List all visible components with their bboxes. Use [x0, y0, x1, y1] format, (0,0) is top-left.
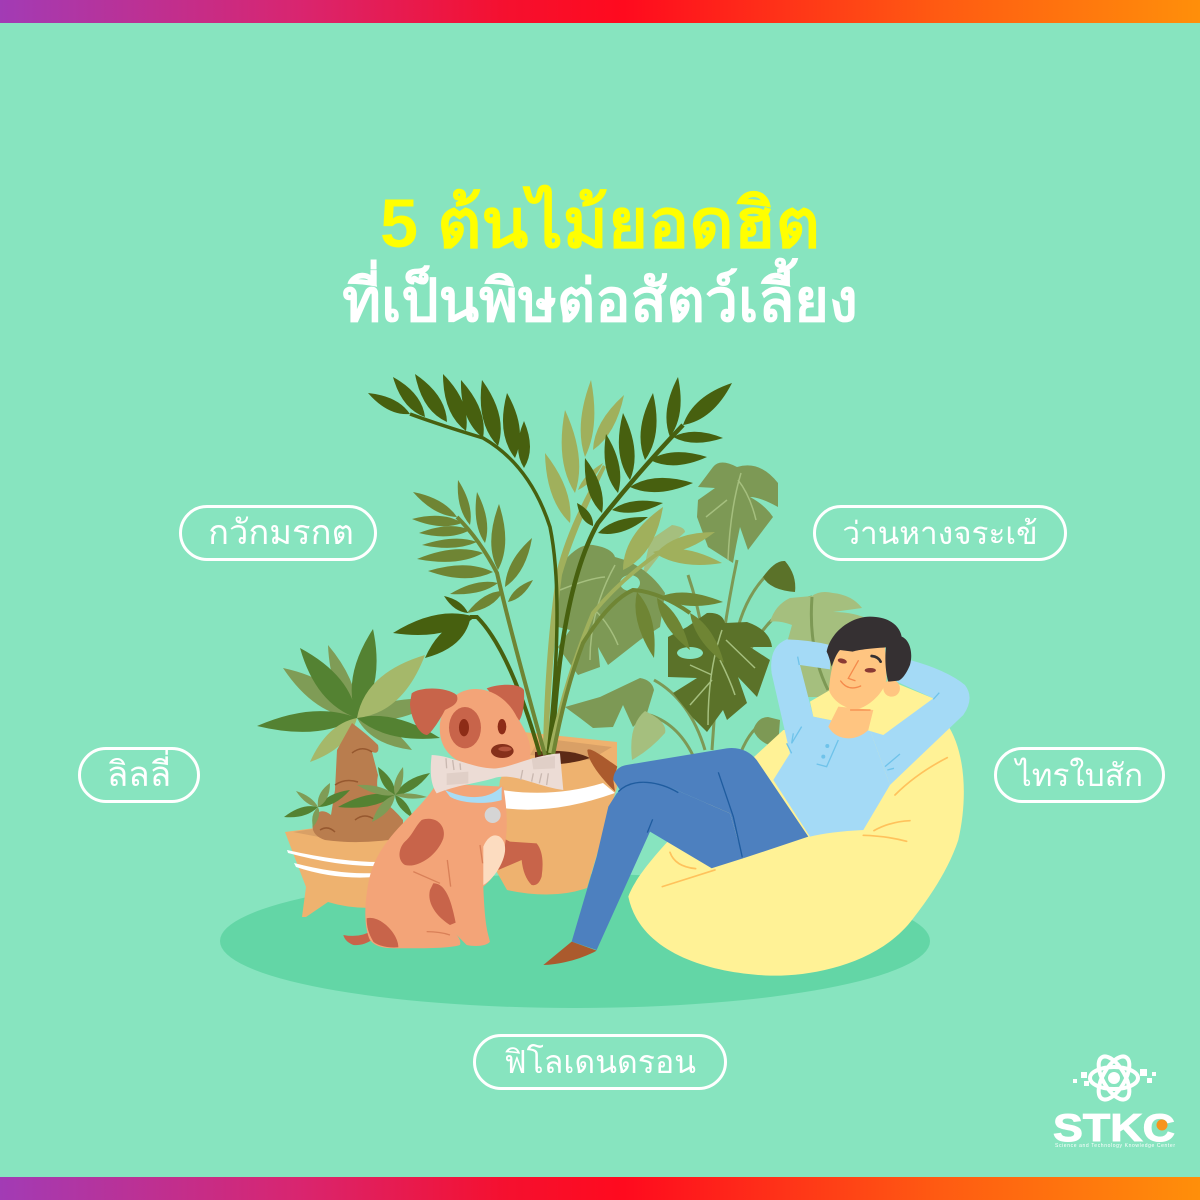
title: white line: ที่เป็นพิษต่อสัตว์เลี้ยง	[342, 268, 858, 334]
logo: STKC: STKC	[1053, 1107, 1175, 1150]
left potted plant	[257, 629, 440, 917]
pill: ฟิโลเดนดรอน	[473, 1034, 727, 1090]
logo: STKC	[1053, 1052, 1175, 1150]
dog with newspaper	[343, 685, 563, 948]
big pot	[490, 732, 617, 895]
top gradient bar	[0, 0, 1200, 23]
pill: ลิลลี่: ลิลลี่	[107, 755, 171, 794]
pill: ลิลลี่	[78, 747, 200, 803]
logo atom icon	[1090, 1052, 1138, 1104]
man on bean bag	[543, 617, 970, 976]
title: yellow line: 5 ต้นไม้ยอดฮิต	[380, 185, 820, 262]
pill: ฟิโลเดนดรอน: ฟิโลเดนดรอน	[504, 1044, 696, 1080]
pill: ว่านหางจระเข้	[813, 505, 1067, 561]
pill: ว่านหางจระเข้: ว่านหางจระเข้	[842, 515, 1038, 551]
bottom gradient bar	[0, 1177, 1200, 1200]
palm fronds	[368, 374, 732, 755]
logo: STKC: Science and Technology Knowledge Center	[1055, 1143, 1175, 1149]
back plants: monstera and stems	[558, 462, 875, 760]
pill: กวักมรกต: กวักมรกต	[208, 514, 354, 552]
pill: กวักมรกต	[179, 505, 377, 561]
pill: ไทรใบสัก	[994, 747, 1165, 803]
ground shadow	[220, 874, 930, 1008]
pill: ไทรใบสัก: ไทรใบสัก	[1016, 757, 1143, 793]
